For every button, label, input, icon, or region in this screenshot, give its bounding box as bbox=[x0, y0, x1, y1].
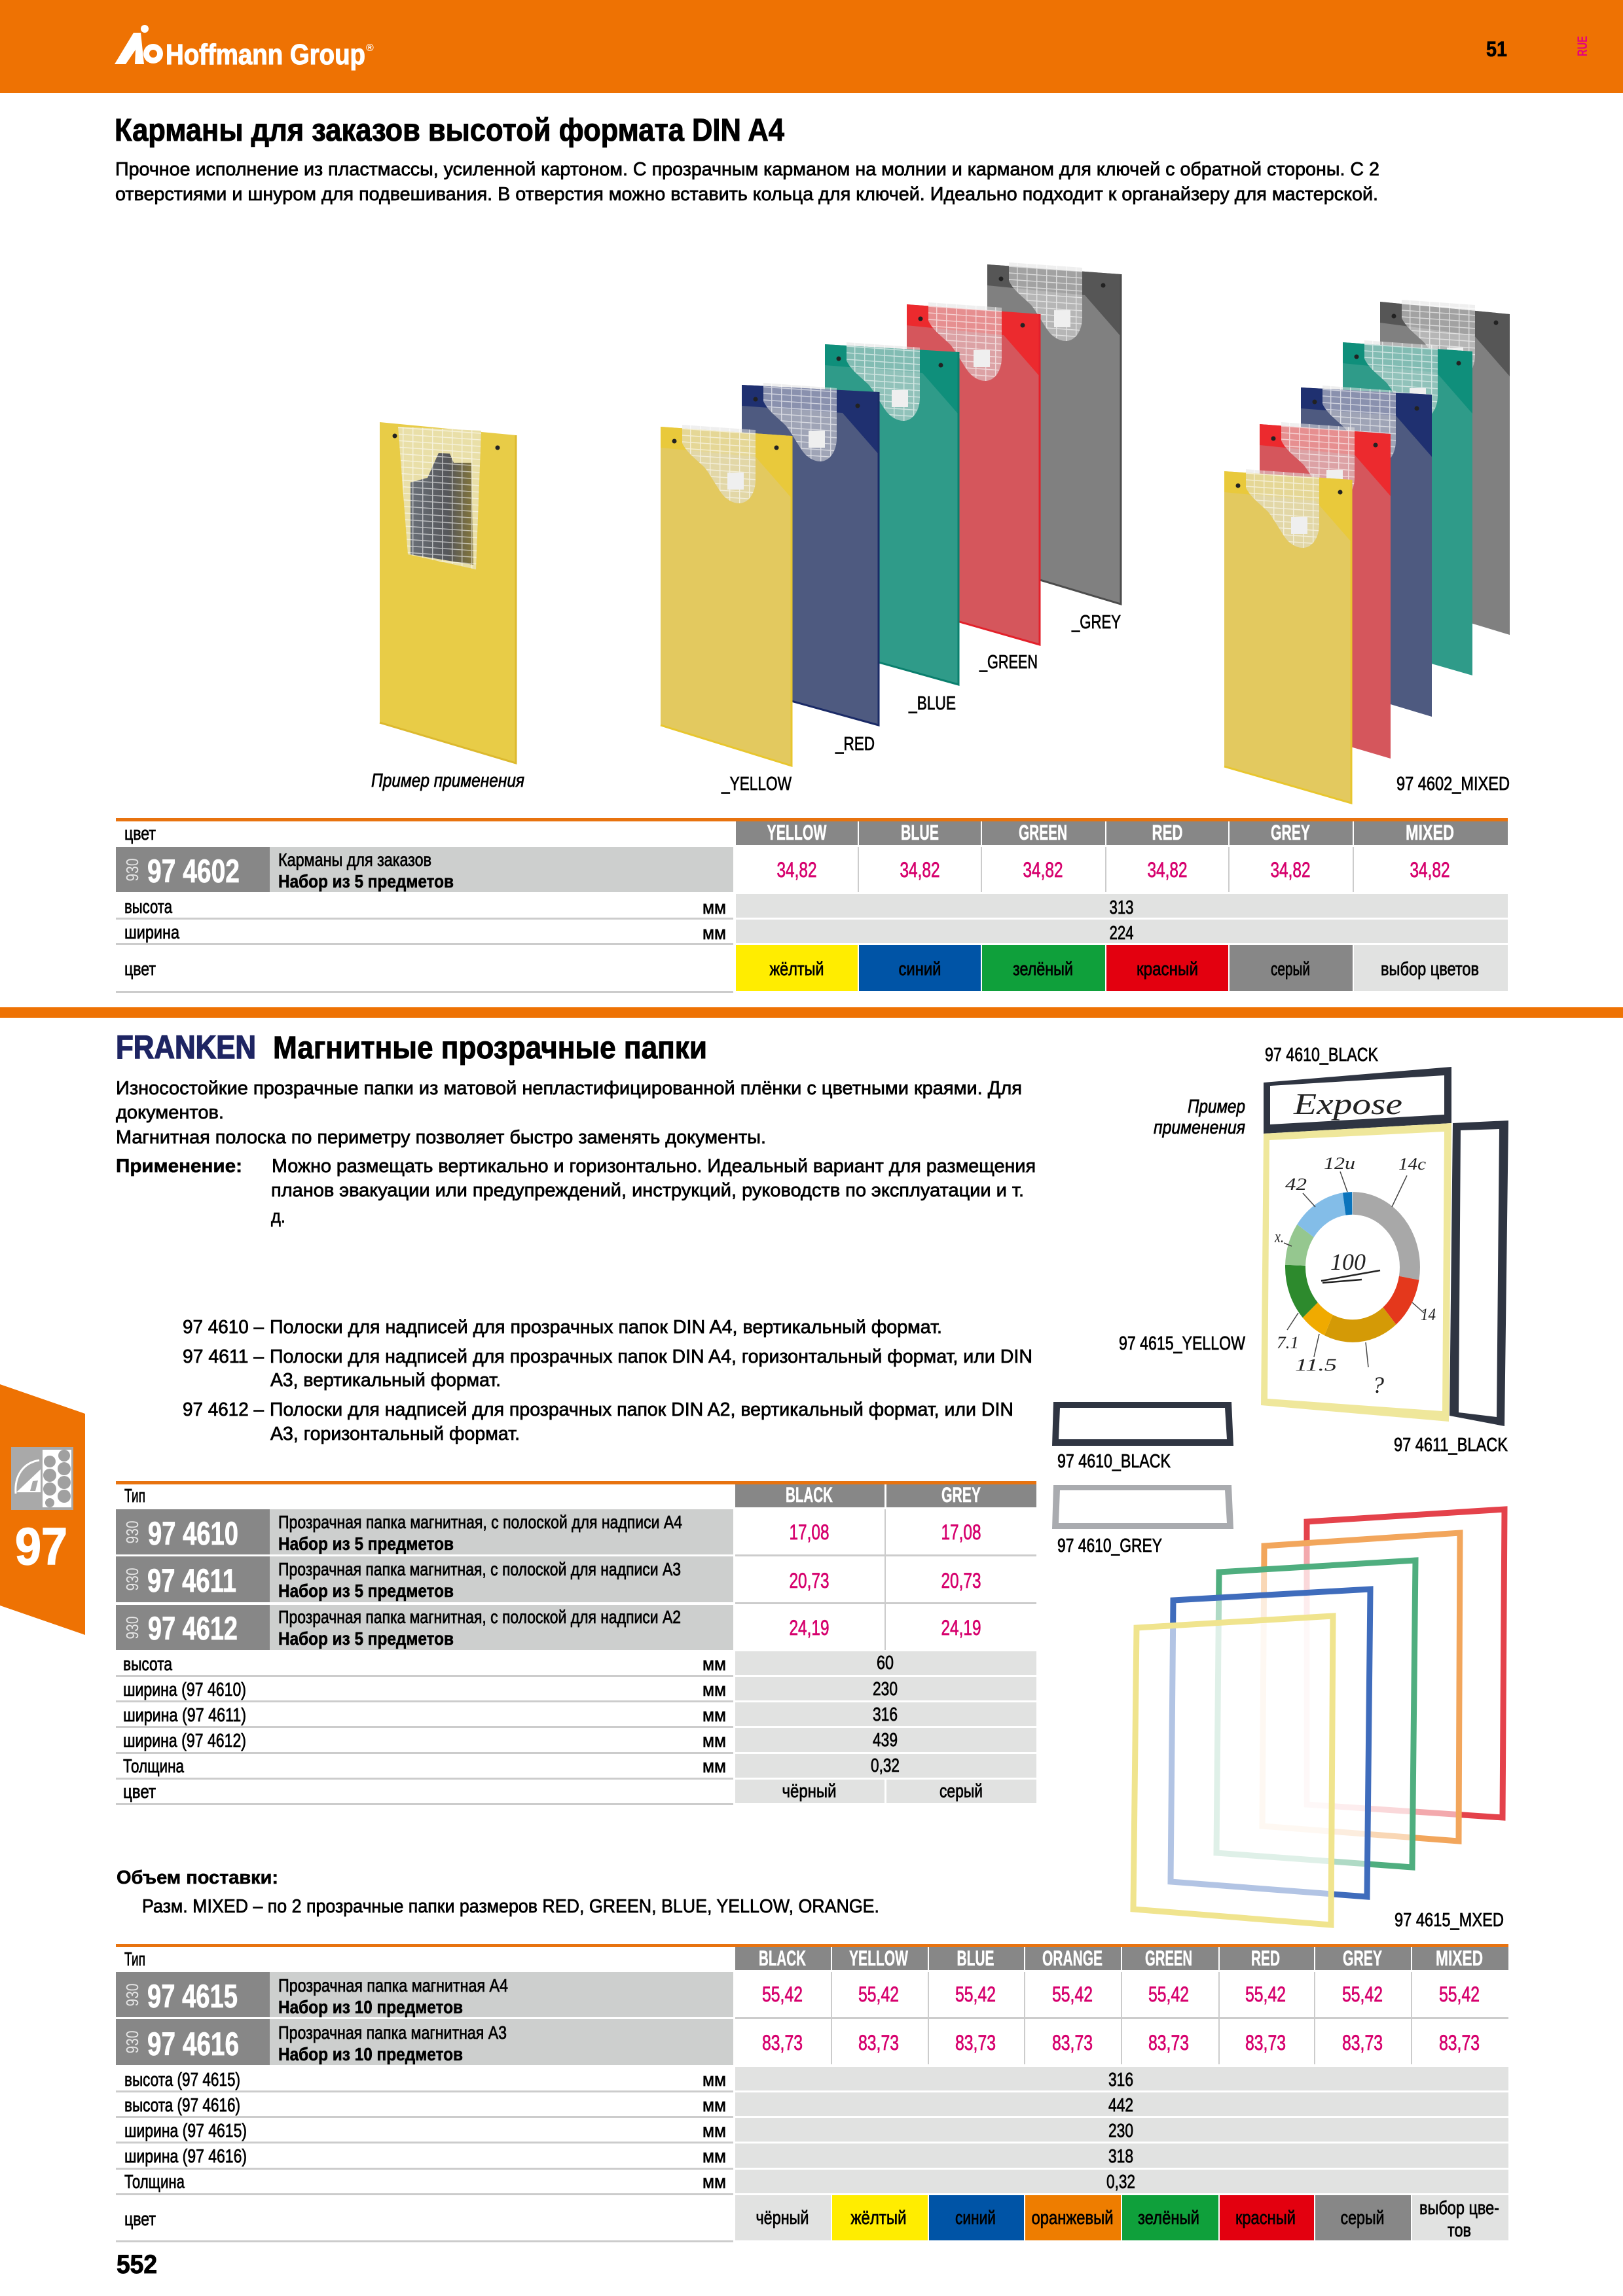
table 2 spec rows: 0,32 bbox=[871, 1755, 900, 1776]
logo: Hoffmann Group: ® bbox=[366, 43, 374, 54]
prices row 97 4602: 34,82 bbox=[1270, 858, 1311, 882]
handwritten chart notes: 12u bbox=[1324, 1154, 1355, 1173]
page marker 51: 51 bbox=[1486, 37, 1507, 61]
table 3 spec rows: ширина (97 4616) bbox=[124, 2146, 247, 2167]
table 1 column headers: YELLOW bbox=[767, 821, 827, 844]
table 1 spec rows: ширина bbox=[124, 922, 180, 943]
table 2 spec rows: высота bbox=[123, 1654, 173, 1675]
product row 97 4610: Набор из 5 предметов bbox=[278, 1534, 454, 1554]
table 1 colour swatches: жёлтый bbox=[770, 959, 824, 980]
table 1 spec rows: высота bbox=[124, 897, 173, 918]
product row 97 4610: 930 bbox=[122, 1521, 142, 1543]
accessory strips list: 97 4611 – bbox=[183, 1346, 264, 1367]
handwritten chart notes: 100 bbox=[1330, 1249, 1366, 1275]
section 2 title: Магнитные прозрачные папки bbox=[273, 1031, 707, 1066]
table 2 spec rows: мм bbox=[702, 1731, 726, 1751]
table 3 colour swatches: тов bbox=[1448, 2220, 1471, 2241]
product row 97 4610: 97 4610 bbox=[148, 1515, 238, 1552]
table 1 column headers: MIXED bbox=[1406, 821, 1454, 844]
table 3 colour swatches: синий bbox=[955, 2208, 996, 2229]
table 2 spec rows: ширина (97 4612) bbox=[123, 1731, 246, 1751]
product row 97 4611 bbox=[116, 1556, 733, 1602]
section 2 description: Износостойкие прозрачные папки из матовой непластифицированной плёнки с цветными краями. Для bbox=[116, 1078, 1022, 1099]
photo: green folder bbox=[825, 342, 958, 685]
label: 97 4610 grey: 97 4610_GREY bbox=[1057, 1535, 1162, 1556]
accessory strips list: Полоски для надписей для прозрачных папок DIN A2, вертикальный формат, или DIN bbox=[270, 1399, 1013, 1420]
label: mixed set: 97 4602_MIXED bbox=[1396, 774, 1510, 795]
product row 97 4611: Прозрачная папка магнитная, с полоской для надписи A3 bbox=[278, 1559, 681, 1579]
product row 97 4615: Набор из 10 предметов bbox=[278, 1997, 463, 2017]
product row 97 4616 bbox=[116, 2019, 733, 2065]
table 3 spec rows: мм bbox=[702, 2146, 726, 2167]
prices row 97 4602: 34,82 bbox=[776, 858, 817, 882]
table 1 colour swatches: зелёный bbox=[1013, 959, 1073, 980]
table 2 prices: 20,73 bbox=[941, 1569, 981, 1592]
product row 97 4602: 97 4602 bbox=[147, 853, 240, 889]
product row 97 4615: Прозрачная папка магнитная A4 bbox=[278, 1975, 508, 1996]
product row 97 4616: 930 bbox=[122, 2030, 142, 2054]
caption: usage example: Пример bbox=[1188, 1096, 1245, 1117]
table 2 spec rows: 316 bbox=[873, 1704, 898, 1725]
photo: black strip bbox=[1052, 1402, 1233, 1446]
table 3 spec rows: высота (97 4616) bbox=[124, 2095, 240, 2116]
table 3 prices: 55,42 bbox=[1342, 1982, 1383, 2006]
photo: grey strip bbox=[1052, 1485, 1233, 1529]
prices row 97 4602: 34,82 bbox=[1023, 858, 1063, 882]
table 2 spec rows bbox=[116, 1651, 1036, 1805]
logo: Hoffmann Group bbox=[115, 25, 374, 71]
photo: black vertical frame bbox=[1450, 1121, 1508, 1426]
rotated code RUE: RUE bbox=[1575, 36, 1590, 56]
table 3 prices: 83,73 bbox=[1342, 2031, 1383, 2054]
table 3 prices: 83,73 bbox=[1052, 2031, 1093, 2054]
table 3 prices: 55,42 bbox=[1148, 1982, 1189, 2006]
table 2 prices: 24,19 bbox=[941, 1616, 981, 1640]
section 2 description: Применение: bbox=[116, 1156, 242, 1177]
product row 97 4616: 97 4616 bbox=[147, 2026, 239, 2062]
table 3 spec rows: мм bbox=[702, 2095, 726, 2116]
section 1 description: отверстиями и шнуром для подвешивания. В отверстия можно вставить кольца для ключей. Идеально подходит к органайзеру для мастерской. bbox=[115, 184, 1378, 205]
table 3 spec rows: 0,32 bbox=[1106, 2172, 1135, 2193]
colour labels for folders: _GREEN bbox=[979, 652, 1038, 673]
table 3 column headers: GREEN bbox=[1145, 1946, 1192, 1970]
table 1 column headers: GREEN bbox=[1019, 821, 1067, 844]
caption: usage example: применения bbox=[1154, 1117, 1245, 1138]
table 2 prices: 17,08 bbox=[941, 1520, 981, 1544]
label: 97 4610 black: 97 4610_BLACK bbox=[1057, 1451, 1171, 1472]
table 2 spec rows: цвет bbox=[123, 1782, 156, 1803]
product row 97 4611: Набор из 5 предметов bbox=[278, 1581, 454, 1601]
table 2 spec rows: Толщина bbox=[123, 1756, 185, 1777]
table 1 spec rows: 313 bbox=[1109, 897, 1134, 918]
table 1: order pockets bbox=[116, 818, 1508, 993]
table 2 column headers: BLACK bbox=[786, 1483, 833, 1507]
table 1 column headers: RED bbox=[1152, 821, 1182, 844]
accessory strips list: Полоски для надписей для прозрачных папок DIN A4, горизонтальный формат, или DIN bbox=[270, 1346, 1032, 1367]
colour labels for folders: _GREY bbox=[1071, 612, 1121, 633]
caption: usage example bbox=[1154, 1096, 1245, 1138]
section 2 description: Магнитная полоска по периметру позволяет быстро заменять документы. bbox=[116, 1127, 766, 1148]
table 3 spec rows: 230 bbox=[1108, 2121, 1133, 2142]
table 2 spec rows: серый bbox=[939, 1781, 983, 1802]
accessory strips list: 97 4612 – bbox=[183, 1399, 264, 1420]
table 3 spec rows: 318 bbox=[1108, 2146, 1133, 2167]
table 1 colour swatches: серый bbox=[1271, 959, 1310, 980]
accessory strips list: А3, вертикальный формат. bbox=[270, 1370, 501, 1391]
table 2 spec rows: 60 bbox=[877, 1653, 894, 1674]
photo: black strip frame with Expose: Expose bbox=[1293, 1087, 1402, 1121]
handwritten chart notes: 14 bbox=[1421, 1305, 1436, 1324]
delivery note: Разм. MIXED – по 2 прозрачные папки размеров RED, GREEN, BLUE, YELLOW, ORANGE. bbox=[142, 1896, 879, 1917]
product row 97 4602 bbox=[116, 847, 733, 892]
table 1 spec rows: 224 bbox=[1109, 923, 1134, 944]
table 2 spec rows: 230 bbox=[873, 1679, 898, 1700]
donut chart bbox=[1295, 1203, 1410, 1331]
product row 97 4615 bbox=[116, 1972, 733, 2017]
table 2 prices: 24,19 bbox=[790, 1616, 829, 1640]
table 2: magnetic folders with strip: Тип bbox=[124, 1486, 145, 1507]
page number: 552 bbox=[117, 2250, 157, 2279]
table 1 colour swatches: красный bbox=[1137, 959, 1198, 980]
product row 97 4610: Прозрачная папка магнитная, с полоской для надписи A4 bbox=[278, 1512, 682, 1532]
product row 97 4615: 930 bbox=[122, 1983, 142, 2007]
table 3 spec rows: ширина (97 4615) bbox=[124, 2121, 247, 2142]
product row 97 4616: Набор из 10 предметов bbox=[278, 2044, 463, 2064]
table 2 spec rows: мм bbox=[702, 1679, 726, 1700]
table 3 prices: 83,73 bbox=[762, 2031, 803, 2054]
table 3 spec rows: 442 bbox=[1108, 2095, 1133, 2116]
product row 97 4602: 930 bbox=[122, 859, 142, 881]
table 3 spec rows: цвет bbox=[124, 2209, 156, 2230]
label: 97 4610 black top: 97 4610_BLACK bbox=[1265, 1045, 1379, 1066]
table 3 spec rows: 316 bbox=[1108, 2070, 1133, 2090]
caption: usage example: Пример применения bbox=[371, 770, 524, 791]
logo: Hoffmann Group: Hoffmann Group bbox=[166, 39, 365, 71]
handwritten chart notes: 11.5 bbox=[1295, 1355, 1337, 1374]
accessory strips list bbox=[183, 1317, 1032, 1444]
product row 97 4612: Набор из 5 предметов bbox=[278, 1628, 454, 1649]
section 1 description bbox=[115, 159, 1379, 205]
label: 97 4615 mixed: 97 4615_MXED bbox=[1395, 1910, 1504, 1931]
delivery note: Объем поставки: bbox=[117, 1867, 278, 1888]
table 2 spec rows: ширина (97 4611) bbox=[123, 1705, 246, 1726]
table 3 spec rows: мм bbox=[702, 2070, 726, 2090]
handwritten chart notes: 14c bbox=[1398, 1155, 1427, 1174]
section 2 description bbox=[116, 1078, 1036, 1227]
table 3 colour swatches: чёрный bbox=[756, 2208, 809, 2229]
handwritten chart notes: x. bbox=[1274, 1227, 1284, 1246]
product row 97 4602: Карманы для заказов bbox=[278, 850, 431, 870]
table 3: magnetic folders A4 / A3: Тип bbox=[124, 1949, 145, 1970]
accessory strips list: А3, горизонтальный формат. bbox=[270, 1424, 520, 1444]
prices row 97 4602: 34,82 bbox=[1410, 858, 1450, 882]
product row 97 4610 bbox=[116, 1509, 733, 1554]
table 3 prices: 83,73 bbox=[955, 2031, 996, 2054]
product row 97 4611: 930 bbox=[122, 1568, 142, 1590]
section divider bbox=[0, 1007, 1623, 1018]
table 3 column headers: YELLOW bbox=[849, 1946, 909, 1970]
photo: yellow frame with donut chart bbox=[1261, 1123, 1451, 1422]
table 3 spec rows: Толщина bbox=[124, 2172, 185, 2193]
header band bbox=[0, 0, 1623, 93]
photo: yellow folder bbox=[661, 425, 792, 766]
table 1 column headers: BLUE bbox=[901, 821, 939, 844]
side tab chapter 97 bbox=[0, 1384, 85, 1635]
product row 97 4602: Набор из 5 предметов bbox=[278, 871, 454, 891]
table 3 prices: 55,42 bbox=[1245, 1982, 1286, 2006]
table 3 column headers: BLACK bbox=[759, 1946, 806, 1970]
table 3 colour swatches: выбор цве- bbox=[1419, 2198, 1499, 2219]
table 3 prices: 83,73 bbox=[1439, 2031, 1480, 2054]
product row 97 4612: 97 4612 bbox=[148, 1610, 238, 1647]
table 3 colour swatches: зелёный bbox=[1138, 2208, 1199, 2229]
table 3 prices: 55,42 bbox=[858, 1982, 899, 2006]
table 3 prices: 83,73 bbox=[1148, 2031, 1189, 2054]
table 2 spec rows: 439 bbox=[873, 1730, 898, 1751]
label: 97 4615 yellow: 97 4615_YELLOW bbox=[1119, 1333, 1246, 1354]
handwritten chart notes: 42 bbox=[1285, 1175, 1307, 1194]
section 2 description: Можно размещать вертикально и горизонтально. Идеальный вариант для размещения bbox=[272, 1156, 1036, 1177]
handwritten chart notes: 7.1 bbox=[1277, 1333, 1299, 1352]
accessory strips list: 97 4610 – bbox=[183, 1317, 264, 1338]
section 1 description: Прочное исполнение из пластмассы, усиленной картоном. С прозрачным карманом на молнии и карманом для ключей с обратной стороны. С 2 bbox=[115, 159, 1379, 180]
table 1 colour swatches bbox=[736, 945, 1508, 991]
table 2 column headers bbox=[735, 1483, 1036, 1507]
table 3 column headers: ORANGE bbox=[1042, 1946, 1103, 1970]
section 2 description: планов эвакуации или предупреждений, инструкций, руководств по эксплуатации и т. bbox=[271, 1180, 1024, 1201]
accessory strips list: Полоски для надписей для прозрачных папок DIN A4, вертикальный формат. bbox=[270, 1317, 942, 1338]
photo: blue folder bbox=[742, 383, 879, 725]
table 3 prices: 55,42 bbox=[1052, 1982, 1093, 2006]
table 1 spec rows: мм bbox=[702, 897, 726, 918]
table 3 spec rows: мм bbox=[702, 2172, 726, 2193]
table 3 prices: 83,73 bbox=[858, 2031, 899, 2054]
product row 97 4612 bbox=[116, 1605, 733, 1650]
label: 97 4611 black: 97 4611_BLACK bbox=[1394, 1435, 1508, 1456]
photo: grey folder bbox=[987, 262, 1121, 604]
photo: red folder bbox=[907, 302, 1040, 645]
colour labels for folders: _YELLOW bbox=[721, 774, 792, 795]
table 1 colour swatches: синий bbox=[898, 959, 941, 980]
photo: mixed set of folders bbox=[1224, 300, 1510, 803]
table 3 colour swatches: оранжевый bbox=[1032, 2208, 1113, 2229]
table 2 spec rows: мм bbox=[702, 1654, 726, 1675]
table 2 prices: 17,08 bbox=[790, 1520, 829, 1544]
table 3 column headers: BLUE bbox=[957, 1946, 994, 1970]
table 3 column headers: GREY bbox=[1343, 1946, 1382, 1970]
product row 97 4615: 97 4615 bbox=[147, 1978, 238, 2015]
table 1 column headers bbox=[736, 821, 1508, 845]
photo: mixed magnetic frames bbox=[1133, 1509, 1504, 1925]
table 2 column headers: GREY bbox=[941, 1483, 981, 1507]
section 2 description: документов. bbox=[116, 1102, 224, 1123]
table 2 prices: 20,73 bbox=[790, 1569, 829, 1592]
table 3 prices: 55,42 bbox=[955, 1982, 996, 2006]
table 1 column headers: GREY bbox=[1271, 821, 1310, 844]
table 3 colour swatches: красный bbox=[1235, 2208, 1296, 2229]
table 3 spec rows bbox=[116, 2067, 1508, 2242]
section 2 description: д. bbox=[271, 1206, 285, 1227]
table 2 spec rows: чёрный bbox=[782, 1781, 837, 1802]
table 1 spec rows: мм bbox=[702, 923, 726, 944]
table 3 column headers: RED bbox=[1251, 1946, 1280, 1970]
delivery note bbox=[117, 1867, 879, 1917]
table 3 column headers bbox=[735, 1946, 1508, 1970]
table 2 spec rows: ширина (97 4610) bbox=[123, 1679, 246, 1700]
colour labels for folders bbox=[721, 612, 1121, 795]
table 2 prices bbox=[735, 1509, 1036, 1650]
table 3 column headers: MIXED bbox=[1436, 1946, 1483, 1970]
handwritten chart notes: ? bbox=[1372, 1372, 1384, 1398]
table 3 prices: 55,42 bbox=[762, 1982, 803, 2006]
table 3: magnetic folders A4 / A3 bbox=[116, 1944, 1508, 2242]
colour labels for folders: _BLUE bbox=[908, 693, 956, 714]
table 1 colour swatches: выбор цветов bbox=[1381, 959, 1479, 980]
product row 97 4611: 97 4611 bbox=[147, 1562, 236, 1599]
table 3 colour swatches: жёлтый bbox=[851, 2208, 906, 2229]
product row 97 4616: Прозрачная папка магнитная A3 bbox=[278, 2022, 507, 2043]
table 3 prices bbox=[735, 1972, 1508, 2064]
table 3 spec rows: высота (97 4615) bbox=[124, 2070, 240, 2090]
product row 97 4612: Прозрачная папка магнитная, с полоской для надписи A2 bbox=[278, 1607, 681, 1627]
colour labels for folders: _RED bbox=[835, 734, 875, 755]
table 3 colour swatches: серый bbox=[1341, 2208, 1384, 2229]
prices row 97 4602: 34,82 bbox=[1147, 858, 1188, 882]
handwritten chart notes bbox=[1274, 1154, 1436, 1398]
table 2 spec rows: мм bbox=[702, 1705, 726, 1726]
table 3 prices: 83,73 bbox=[1245, 2031, 1286, 2054]
table 2: magnetic folders with strip bbox=[116, 1481, 1036, 1805]
photo: black strip frame with Expose bbox=[1264, 1067, 1451, 1134]
table 1: order pockets: цвет bbox=[124, 823, 156, 844]
section 1 title: Карманы для заказов высотой формата DIN A4 bbox=[115, 113, 784, 148]
table 1 spec rows: цвет bbox=[124, 959, 156, 980]
prices row 97 4602 bbox=[776, 847, 1450, 892]
icon: chapter pictogram bbox=[11, 1447, 73, 1510]
photo: usage example yellow folder bbox=[380, 422, 516, 763]
table 1 spec rows bbox=[116, 894, 1508, 993]
table 3 colour swatches bbox=[735, 2195, 1508, 2241]
prices row 97 4602: 34,82 bbox=[900, 858, 940, 882]
table 3 spec rows: мм bbox=[702, 2121, 726, 2142]
product row 97 4612: 930 bbox=[122, 1617, 142, 1639]
table 3 prices: 55,42 bbox=[1439, 1982, 1480, 2006]
table 2 spec rows: мм bbox=[702, 1756, 726, 1777]
side tab chapter 97: 97 bbox=[15, 1517, 67, 1575]
logo: FRANKEN: FRANKEN bbox=[116, 1029, 256, 1066]
